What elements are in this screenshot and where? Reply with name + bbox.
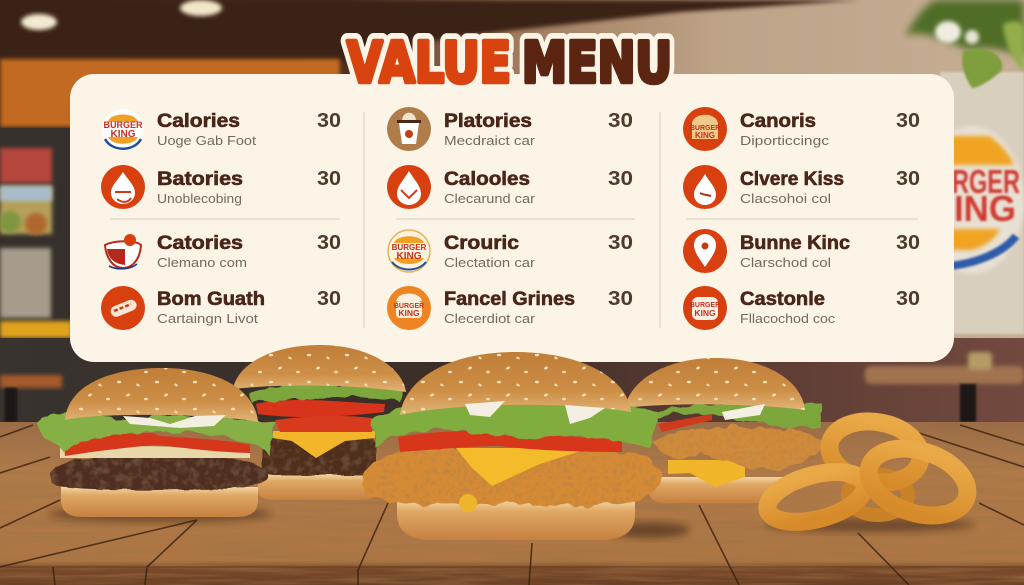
icon: drop (683, 165, 727, 209)
row: canoris (740, 110, 920, 148)
burger 1: beef (36, 368, 275, 522)
title (347, 31, 672, 96)
icon: orange burger badge (387, 286, 431, 330)
row: platories: Platories (444, 111, 532, 132)
row: clvere kiss: Clvere Kiss (740, 169, 844, 190)
row: calooles: Calooles (444, 169, 530, 190)
row: fancel grines: Clecerdiot car (444, 311, 536, 326)
row: catories: Clemano com (157, 255, 247, 270)
icon: white drop (387, 165, 431, 209)
onion rings (762, 414, 976, 532)
icon: burger king logo: BURGER (103, 120, 143, 130)
row: bunne kinc: 30 (896, 232, 920, 254)
row: calories (157, 110, 341, 148)
row: clvere kiss: Clacsohoi col (740, 191, 831, 206)
icon: hot dog (101, 286, 145, 330)
row: bunne kinc: Clarschod col (740, 255, 831, 270)
row: castonle (740, 288, 920, 326)
row: bunne kinc: Bunne Kinc (740, 233, 850, 254)
row: fancel grines: Fancel Grines (444, 289, 575, 310)
row: bunne kinc (740, 232, 920, 270)
icon: burger king logo (102, 109, 144, 151)
title: VALUE (347, 31, 511, 96)
row: calories: 30 (317, 110, 341, 132)
row: clvere kiss (740, 168, 920, 206)
wooden table (0, 422, 1024, 585)
row: castonle: Fllacochod coc (740, 311, 836, 326)
background logo sign (920, 126, 1024, 274)
row: canoris: 30 (896, 110, 920, 132)
column 2 (387, 107, 633, 330)
row: batories: Batories (157, 169, 243, 190)
icon: burger king logo: KING (396, 251, 422, 262)
row: canoris: Diporticcingc (740, 133, 830, 148)
row: bom guath: Bom Guath (157, 289, 265, 310)
row: calories: Uoge Gab Foot (157, 133, 256, 148)
row: batories (157, 168, 341, 206)
icon: burger king logo (388, 230, 430, 272)
row: crouric (444, 232, 633, 270)
row: catories: Catories (157, 233, 243, 254)
row: platories: Mecdraict car (444, 133, 536, 148)
icon: orange burger badge: BURGER (394, 303, 424, 310)
icon: map pin (683, 229, 727, 273)
row: bom guath: Cartaingn Livot (157, 311, 258, 326)
row: castonle: 30 (896, 288, 920, 310)
title: MENU (522, 31, 672, 96)
icon: burger king badge: KING (694, 308, 716, 318)
menu panel (70, 74, 954, 362)
row: fancel grines (444, 288, 633, 326)
icon: burger king logo: BURGER (392, 243, 427, 252)
icon: bowl (105, 234, 141, 269)
icon: red drop (101, 165, 145, 209)
title: VALUE (347, 31, 511, 96)
row: clvere kiss: 30 (896, 168, 920, 190)
icon: burger king logo: KING (110, 129, 136, 140)
row: catories: 30 (317, 232, 341, 254)
row: canoris: Canoris (740, 111, 816, 132)
column 3 (683, 107, 920, 330)
icon: red burger badge: BURGER (690, 125, 720, 132)
row: calories: Calories (157, 111, 240, 132)
hanging plant (905, 0, 1024, 88)
restaurant background (0, 0, 1024, 426)
row: castonle: Castonle (740, 289, 825, 310)
row: crouric: 30 (608, 232, 633, 254)
row: platories (444, 110, 633, 148)
icon: burger king badge: BURGER (690, 302, 720, 309)
column 1 (101, 109, 341, 330)
row: calooles: 30 (608, 168, 633, 190)
icon: burger king badge (683, 286, 727, 330)
row: batories: Unoblecobing (157, 191, 242, 206)
icon: orange burger badge: KING (398, 308, 420, 318)
background logo sign: ING (954, 188, 1016, 229)
row: catories (157, 232, 341, 270)
row: calooles (444, 168, 633, 206)
icon: red burger badge (683, 107, 727, 151)
row: crouric: Crouric (444, 233, 519, 254)
row: bom guath: 30 (317, 288, 341, 310)
burger 2: beef and cheese (233, 345, 406, 500)
row: calooles: Clecarund car (444, 191, 536, 206)
row: crouric: Clectation car (444, 255, 536, 270)
row: bom guath (157, 288, 341, 326)
icon: red burger badge: KING (695, 131, 715, 140)
icon: coffee cup (387, 107, 431, 151)
row: fancel grines: 30 (608, 288, 633, 310)
title: MENU (522, 31, 672, 96)
row: platories: 30 (608, 110, 633, 132)
burger 4: crispy chicken (625, 358, 822, 503)
burger 3: crispy chicken with cheese (362, 352, 690, 540)
row: batories: 30 (317, 168, 341, 190)
